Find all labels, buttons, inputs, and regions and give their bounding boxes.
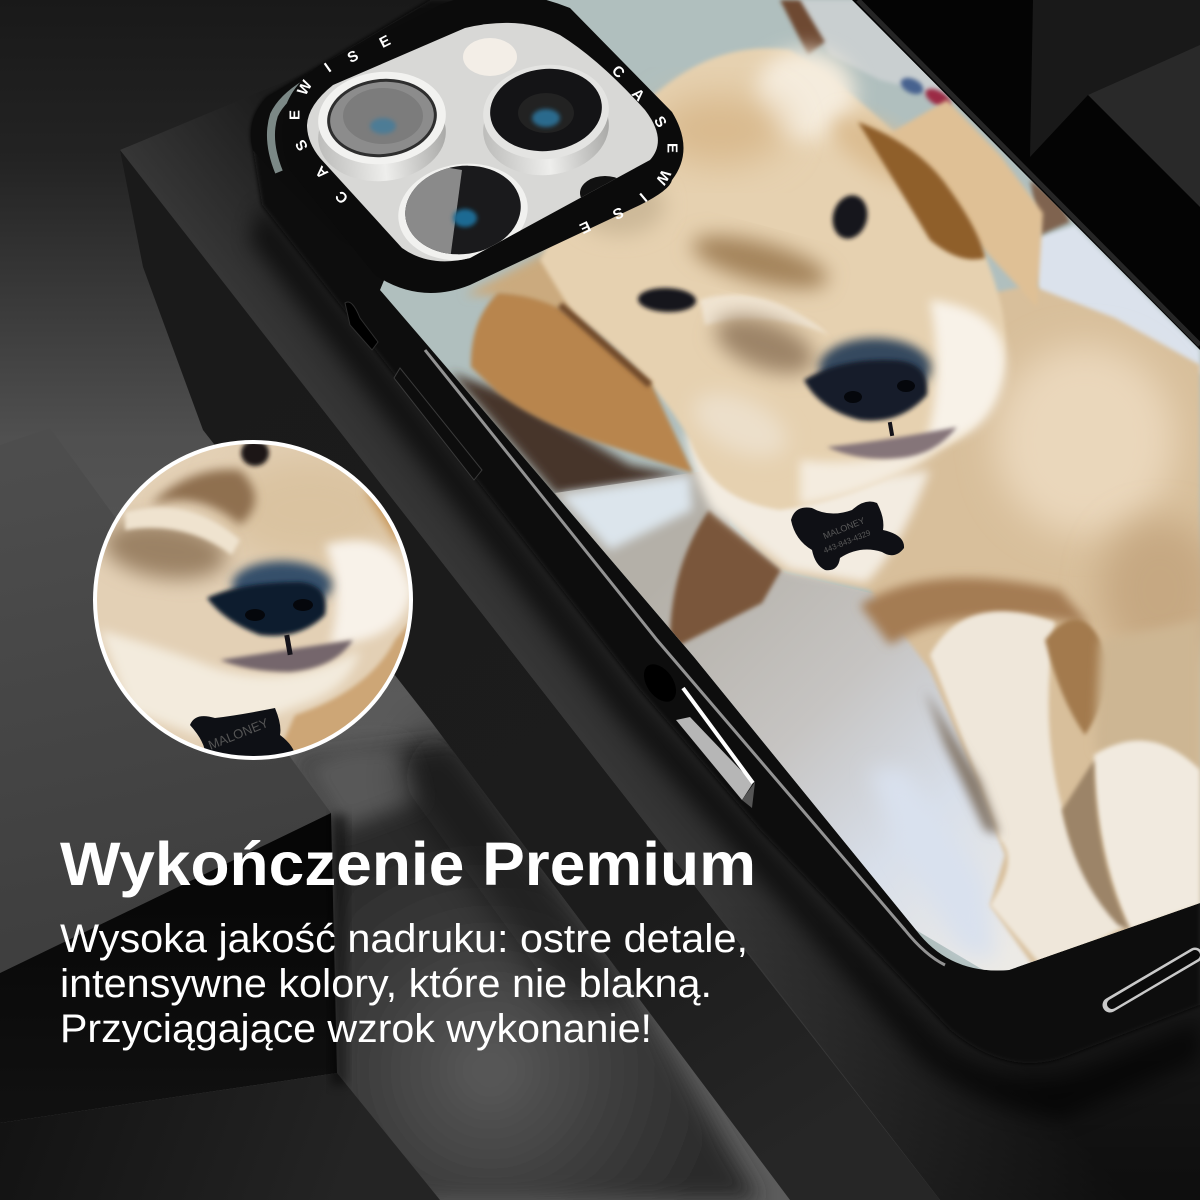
- description text: [60, 917, 748, 1051]
- zoom circle callout: [90, 440, 420, 760]
- leg shadow on blanket: [925, 690, 1000, 835]
- nostril: [293, 599, 313, 611]
- dog tag: MALONEY: [822, 515, 866, 541]
- brow brown stripe: [687, 225, 833, 299]
- case edge gloss: [425, 350, 945, 965]
- right pillow: [1030, 225, 1200, 375]
- right muzzle white: [325, 540, 412, 645]
- lower-left block top face: [0, 428, 331, 973]
- eye right: [828, 191, 872, 243]
- CASEWISE lettering: E: [664, 143, 680, 153]
- chin white: [100, 630, 360, 735]
- block edge shadow: [331, 815, 347, 1085]
- case right-side black wedge: [852, 0, 1200, 360]
- block foot shadow: [0, 1073, 440, 1200]
- brown paw behind: [670, 510, 781, 650]
- nostril: [897, 380, 915, 392]
- fur base: [90, 440, 420, 760]
- brown furniture stripe: [780, 0, 825, 55]
- brown streak upper: [150, 469, 255, 525]
- dog tag: 443-843-4329: [822, 528, 872, 555]
- left ear: [471, 293, 693, 473]
- eye: [241, 440, 269, 466]
- phone corner glass band: [251, 8, 560, 265]
- eye left: [638, 287, 696, 313]
- circle border: [95, 442, 411, 758]
- CASEWISE lettering: W: [652, 167, 674, 188]
- right ear inner brown: [858, 122, 985, 260]
- CASEWISE lettering: I: [321, 60, 335, 76]
- CASEWISE lettering: I: [636, 189, 650, 205]
- camera island: [251, 0, 684, 293]
- blue fabric accent: [898, 75, 926, 97]
- shadow under left ear: [450, 372, 695, 495]
- side button upper: [345, 302, 378, 350]
- brown shoulder stripe: [860, 578, 1090, 645]
- left cheek brown: [100, 514, 230, 586]
- CASEWISE lettering: S: [292, 136, 312, 154]
- head: [540, 48, 1005, 510]
- lip notch: [888, 422, 894, 436]
- cheek cream: [691, 390, 788, 460]
- description text: intensywne kolory, które nie blakną.: [60, 962, 712, 1006]
- main block bottom fade: [700, 890, 1200, 1200]
- chest white: [685, 430, 930, 583]
- nostril: [844, 391, 862, 403]
- pale wall upper right: [795, 0, 960, 100]
- bedding: [555, 468, 1060, 1000]
- CASEWISE lettering: S: [345, 47, 361, 67]
- photo on phone: puppy: [360, 0, 1200, 1000]
- right muzzle white: [925, 300, 1005, 445]
- top-right backdrop: [1030, 0, 1200, 157]
- mouth: [220, 640, 353, 672]
- head top tuft white: [755, 50, 855, 140]
- CASEWISE lettering: S: [610, 203, 626, 223]
- side button long: [394, 368, 482, 480]
- dog tag: [791, 502, 904, 570]
- CASEWISE lettering: E: [577, 217, 593, 237]
- CASEWISE lettering: C: [332, 187, 352, 207]
- nostril: [245, 609, 265, 621]
- camera window: [280, 0, 680, 280]
- phone case body: [251, 0, 1200, 1063]
- rear leg: [1094, 741, 1200, 930]
- side fur right: [1095, 620, 1200, 780]
- red fabric accent: [922, 85, 954, 108]
- muzzle brown fold: [708, 305, 822, 385]
- case edge right highlight: [858, 0, 1200, 345]
- flash: [463, 38, 517, 76]
- description text: Przyciągające wzrok wykonanie!: [60, 1007, 652, 1051]
- lens 1 gray: [314, 66, 450, 187]
- band soft shadow: [400, 720, 640, 1000]
- chin white: [796, 442, 949, 506]
- forehead fur: [655, 95, 785, 165]
- CASEWISE lettering: [286, 32, 680, 237]
- wall behind: [360, 0, 1200, 1000]
- forehead fur right: [822, 107, 898, 186]
- dog body: [742, 286, 1200, 963]
- CASEWISE lettering: A: [312, 162, 332, 182]
- CASEWISE lettering: A: [628, 85, 648, 105]
- body shade: [1100, 520, 1200, 660]
- fur between frame and ear: [467, 250, 573, 312]
- nose top blue: [232, 561, 332, 609]
- right ear: [892, 98, 1046, 291]
- nose: [207, 582, 326, 636]
- bottom charging port: [1110, 955, 1195, 1005]
- silver side button: [637, 658, 755, 808]
- description text: Wysoka jakość nadruku: ostre detale,: [60, 917, 748, 961]
- CASEWISE lettering: E: [286, 110, 304, 120]
- right edge orange: [365, 490, 420, 545]
- CASEWISE lettering: S: [650, 113, 670, 131]
- brown patch between legs: [1045, 619, 1108, 735]
- nose upper: [819, 338, 931, 398]
- main block shaded side band: [120, 150, 940, 1200]
- right block top face: [1088, 45, 1200, 207]
- front leg: [930, 611, 1127, 970]
- lower floor glow: [296, 740, 760, 1200]
- right sliver brown: [1030, 180, 1070, 235]
- leg gap shade: [1062, 760, 1130, 930]
- tag: [190, 708, 295, 760]
- heading: Wykończenie Premium: [60, 830, 756, 898]
- CASEWISE lettering: W: [294, 77, 316, 98]
- lens 2 black: [478, 59, 614, 181]
- corner gloss: [271, 84, 305, 172]
- left ear dark seam: [560, 305, 650, 385]
- bedding blue highlight: [560, 475, 692, 550]
- phone soft shadow: [250, 205, 1200, 1120]
- microphone hole: [580, 176, 630, 210]
- upper left fur: [590, 192, 667, 239]
- body light fur: [995, 345, 1175, 535]
- nose: [804, 360, 927, 421]
- muzzle light fold: [700, 295, 830, 335]
- lip notch: [284, 635, 293, 655]
- white fold: [125, 507, 240, 555]
- lens 3 half gray: [390, 155, 534, 269]
- tag: MALONEY: [206, 715, 271, 753]
- blanket blue highlight: [870, 770, 995, 960]
- lower-left block front face: [0, 813, 337, 1123]
- lower right tan fur: [275, 610, 420, 760]
- upper fur: [220, 455, 400, 565]
- camera ring: [282, 0, 684, 293]
- lit strip beside block: [300, 745, 420, 830]
- mouth: [827, 427, 957, 459]
- CASEWISE lettering: E: [377, 32, 393, 52]
- CASEWISE lettering: C: [608, 62, 628, 82]
